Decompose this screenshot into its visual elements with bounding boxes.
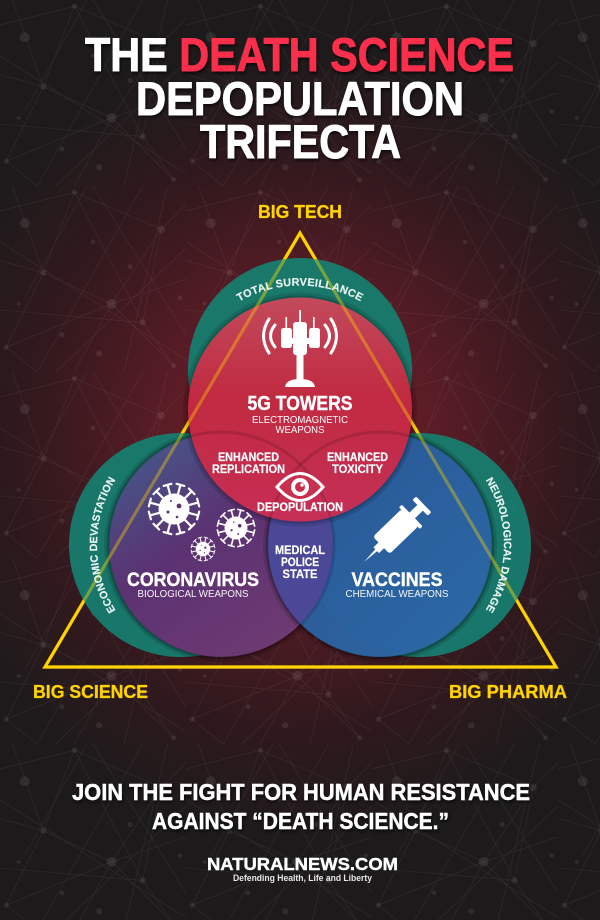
label: coronavirus: BIOLOGICAL WEAPONS (138, 588, 248, 600)
icon: eye (277, 474, 323, 500)
logo: naturalnews.com: Defending Health, Life and Liberty (233, 873, 372, 883)
label: 5G towers: WEAPONS (276, 424, 324, 436)
logo: naturalnews.com: NATURALNEWS.COM (207, 854, 398, 874)
curved label: neurological damage: NEUROLOGICAL DAMAGE (486, 476, 512, 614)
triangle seen through circles (45, 233, 556, 667)
label: coronavirus: CORONAVIRUS (127, 569, 259, 591)
circle: economic devastation teal (69, 433, 293, 657)
venn diagram (69, 258, 531, 662)
label: 5G towers (248, 393, 352, 436)
curved label: economic devastation: ECONOMIC DEVASTATION (90, 476, 116, 614)
circle: vaccines (263, 428, 497, 662)
label: enhanced replication: ENHANCED (218, 452, 279, 464)
label: enhanced toxicity: TOXICITY (332, 464, 383, 476)
call to action (72, 779, 530, 834)
label: big science: BIG SCIENCE (33, 681, 148, 702)
label: vaccines: VACCINES (352, 569, 442, 591)
circle: neurological damage teal (307, 433, 531, 657)
icon: 5G tower (264, 310, 336, 387)
icon: syringe (354, 494, 434, 573)
call to action: JOIN THE FIGHT FOR HUMAN RESISTANCE (72, 779, 530, 805)
logo: naturalnews.com (207, 854, 398, 883)
label: big pharma: BIG PHARMA (449, 681, 567, 702)
title (85, 28, 514, 168)
label: 5G towers: 5G TOWERS (248, 393, 352, 415)
label: enhanced toxicity (327, 452, 388, 476)
label: vaccines: CHEMICAL WEAPONS (346, 588, 448, 600)
circle: coronavirus (104, 428, 338, 662)
label: 5G towers: ELECTROMAGNETIC (252, 414, 348, 426)
label: enhanced replication (212, 452, 285, 476)
label: enhanced replication: REPLICATION (212, 464, 285, 476)
icon: virus large (149, 484, 199, 534)
label: depopulation: DEPOPULATION (257, 502, 343, 514)
icon: virus small (191, 537, 215, 561)
label: medical police state: MEDICAL (275, 545, 325, 557)
label: medical police state: STATE (282, 569, 318, 581)
circle: total surveillance teal (188, 258, 412, 482)
title: THE DEATH SCIENCE (85, 28, 514, 81)
label: big tech: BIG TECH (258, 201, 342, 222)
icon: virus medium (217, 509, 255, 547)
curved label: total surveillance: TOTAL SURVEILLANCE (236, 278, 364, 302)
label: medical police state: POLICE (281, 557, 319, 569)
label: vaccines (346, 569, 448, 600)
overlap: medical police state (268, 466, 333, 624)
lens edges (108, 432, 493, 658)
title: DEPOPULATION (136, 72, 464, 125)
triangle outline (45, 233, 556, 667)
call to action: AGAINST “DEATH SCIENCE.” (152, 808, 449, 834)
title: TRIFECTA (200, 115, 401, 168)
label: medical police state (275, 545, 325, 581)
label: coronavirus (127, 569, 259, 600)
label: enhanced toxicity: ENHANCED (327, 452, 388, 464)
circle: 5G towers (183, 292, 417, 526)
